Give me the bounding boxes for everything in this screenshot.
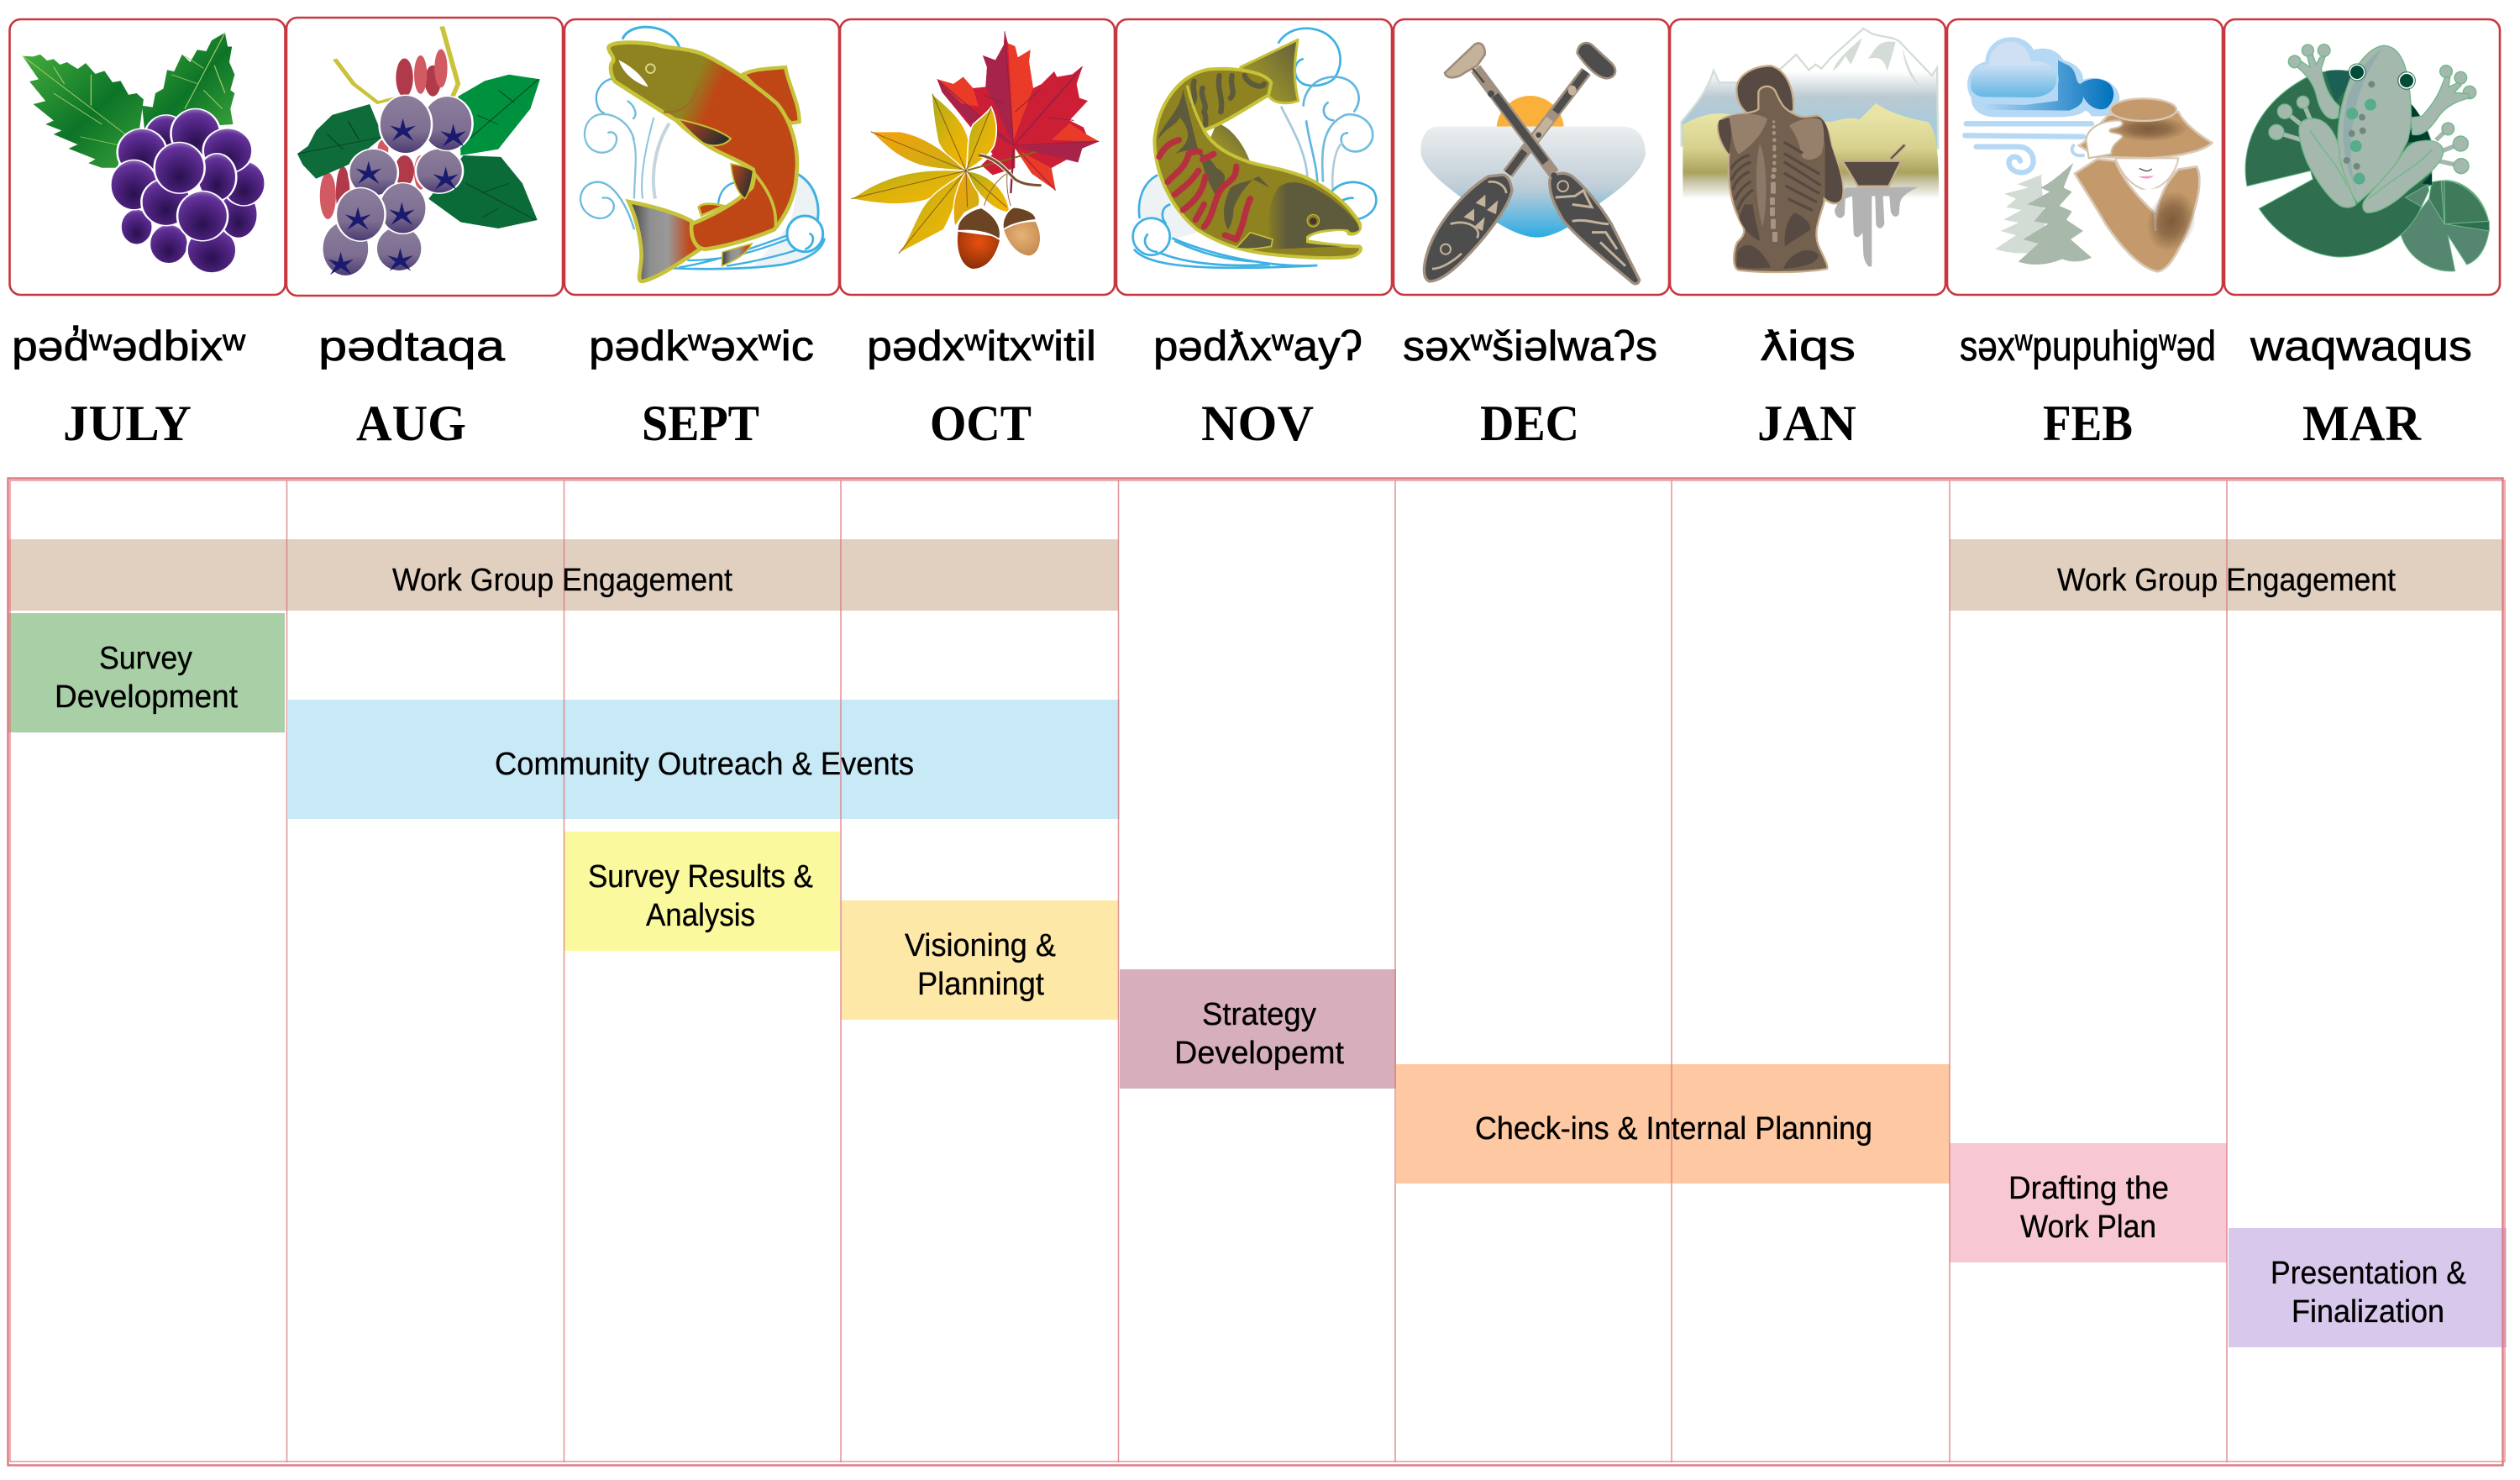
icon: autumn leaves and acorns [851, 31, 1099, 270]
Lushootseed month names: pədkʷəxʷic [589, 323, 814, 370]
bar: survey results [564, 832, 840, 951]
English month names: MAR [2302, 396, 2422, 451]
card: September salmon [564, 19, 839, 295]
icon: cloud, wind, trees and woman in hat [1965, 37, 2212, 271]
icon: seated figure with mountains and bowl [1682, 29, 1939, 272]
bar labels: Drafting the [2008, 1171, 2169, 1206]
card: January figure [1670, 19, 1945, 295]
English month names: NOV [1201, 396, 1314, 451]
Lushootseed month names [12, 323, 2472, 370]
Lushootseed month names: ƛiqs [1761, 323, 1856, 370]
bar: survey development [8, 613, 285, 732]
Lushootseed month names: səxʷpupuhigʷəd [1960, 323, 2216, 370]
English month names: OCT [930, 396, 1032, 451]
card: July blackberry [10, 19, 286, 295]
bar labels: Analysis [646, 898, 755, 933]
bar: strategy [1120, 969, 1396, 1089]
icon: salal berries with leaves [297, 26, 540, 276]
card: August berries [286, 18, 563, 296]
Lushootseed month names: pədtaqa [318, 323, 505, 370]
English month names: FEB [2043, 396, 2133, 451]
card: October leaves [840, 19, 1115, 295]
Lushootseed month names: waqwaqus [2250, 323, 2472, 370]
Lushootseed month names: pədƛxʷayʔ [1153, 323, 1362, 370]
bar: visioning [841, 900, 1118, 1020]
bar labels: Community Outreach & Events [495, 747, 914, 782]
bar labels: Visioning & [905, 928, 1056, 963]
bar: work group engagement first span [8, 539, 1118, 611]
Lushootseed month names: pəd̓ʷədbixʷ [12, 323, 246, 370]
Lushootseed month names: səxʷšiəlwaʔs [1403, 323, 1657, 370]
image cards row [10, 18, 2500, 296]
bar: drafting [1950, 1143, 2227, 1262]
bar labels: Development [55, 680, 238, 715]
bar labels: Work Group Engagement [2057, 563, 2396, 598]
icon: crossed carved paddles over sunrise [1420, 43, 1646, 284]
bar: presentation [2229, 1228, 2507, 1347]
English month names: JULY [63, 396, 192, 451]
bar labels: Check-ins & Internal Planning [1475, 1111, 1872, 1147]
icon: orange leaping salmon [580, 27, 825, 281]
card: November salmon [1116, 19, 1392, 295]
English month names [63, 396, 2422, 451]
bar: community outreach [288, 700, 1120, 819]
bar labels: Survey [99, 641, 192, 676]
bar labels: Survey Results & [588, 859, 813, 895]
card: March frog [2224, 19, 2500, 295]
bar labels: Developemt [1174, 1036, 1344, 1071]
timeline chart [8, 479, 2507, 1465]
icon: blackberries with leaves [23, 33, 265, 273]
bar labels [55, 563, 2466, 1330]
bar labels: Work Plan [2020, 1210, 2156, 1245]
bar: check-ins [1396, 1064, 1950, 1183]
card: February wind [1947, 19, 2223, 295]
bar labels: Work Group Engagement [392, 563, 732, 598]
bar labels: Strategy [1202, 997, 1316, 1032]
English month names: SEPT [642, 396, 759, 451]
bar labels: Planningt [917, 967, 1044, 1002]
card: December paddles [1394, 19, 1669, 295]
bar labels: Presentation & [2271, 1256, 2466, 1291]
bar: work group engagement second span [1950, 539, 2504, 611]
English month names: DEC [1480, 396, 1579, 451]
English month names: JAN [1757, 396, 1856, 451]
Lushootseed month names: pədxʷitxʷitil [867, 323, 1096, 370]
icon: olive spawning salmon [1133, 29, 1376, 268]
English month names: AUG [356, 396, 466, 451]
bar labels: Finalization [2292, 1294, 2444, 1330]
icon: frog on lily pad [2245, 45, 2489, 271]
